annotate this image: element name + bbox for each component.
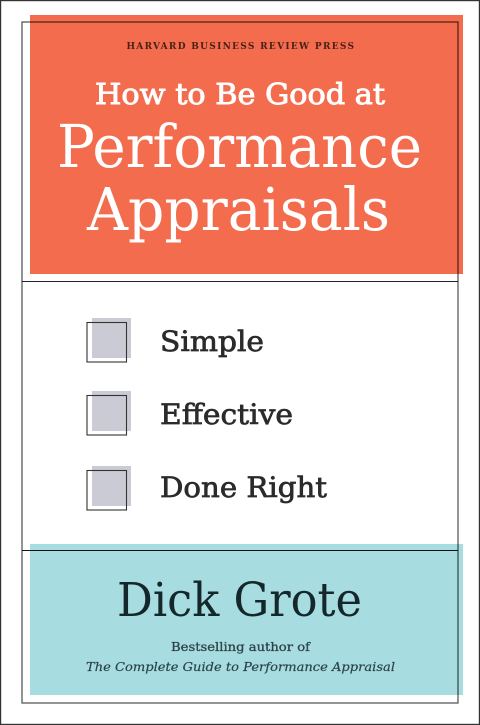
title line: Performance: Performance	[57, 112, 422, 181]
orange background	[30, 15, 463, 274]
checklist: Effective	[87, 391, 293, 435]
checklist: Simple	[87, 318, 264, 362]
checklist: Done Right	[87, 466, 328, 510]
title line: How to Be Good at: How to Be Good at	[95, 77, 385, 111]
panel: title block	[30, 15, 463, 274]
label: Effective	[160, 398, 293, 431]
label: Done Right	[160, 471, 328, 504]
icon: checkbox	[87, 318, 131, 362]
publisher name: HARVARD BUSINESS REVIEW PRESS	[126, 42, 354, 52]
panel: author block	[30, 544, 463, 695]
title line: Appraisals: Appraisals	[86, 175, 390, 244]
icon: checkbox	[87, 466, 131, 510]
author name: Dick Grote	[117, 573, 362, 628]
icon: checkbox	[87, 391, 131, 435]
book title credit: The Complete Guide to Performance Appraisal	[86, 659, 395, 674]
author credit line: Bestselling author of	[171, 639, 311, 654]
teal background	[30, 544, 463, 695]
label: Simple	[160, 325, 264, 358]
